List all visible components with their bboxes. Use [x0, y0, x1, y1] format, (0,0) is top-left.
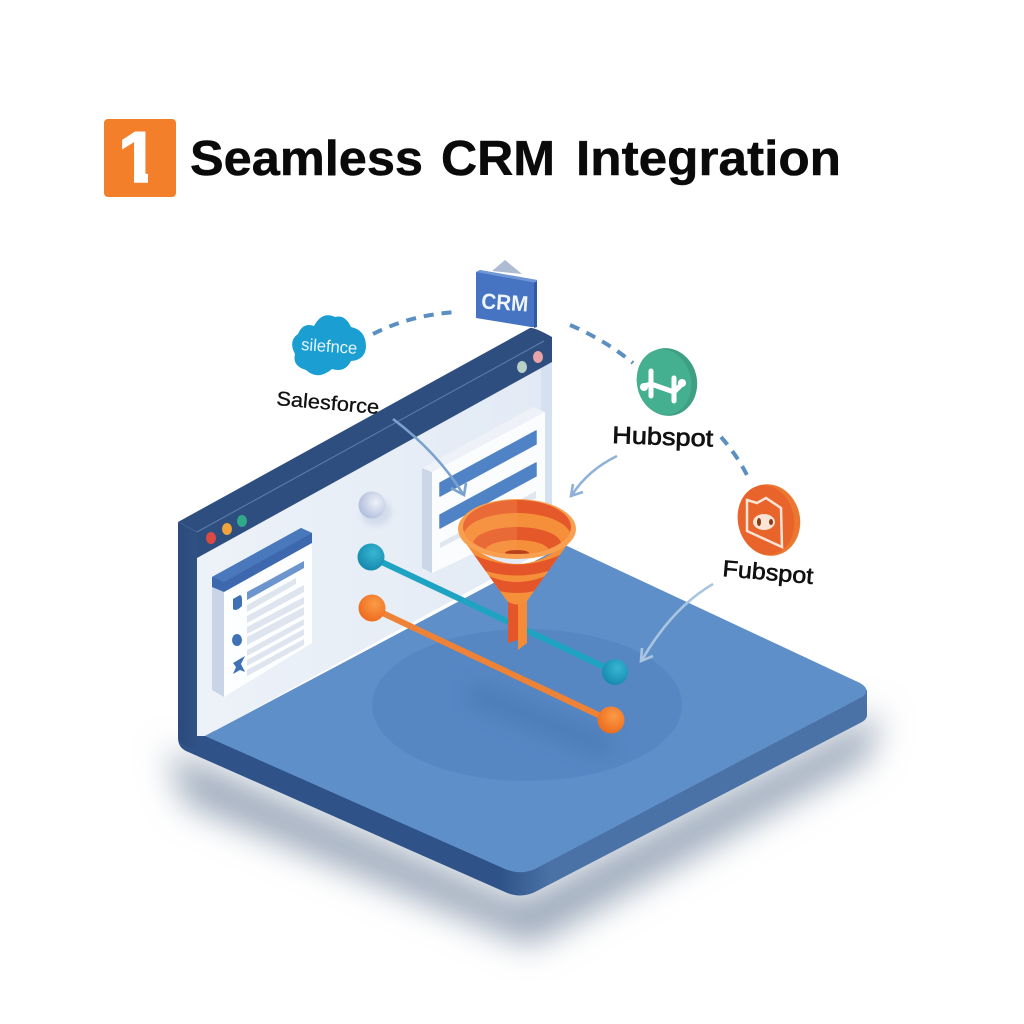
- cast shadow below connector lines: [470, 692, 610, 748]
- data spheres and connector lines: [358, 492, 628, 734]
- window header bar: [178, 328, 552, 558]
- arrow: Fubspot to platform: [641, 584, 713, 661]
- Hubspot label: Hubspot: [612, 422, 714, 453]
- Salesforce logo: [292, 315, 366, 375]
- icon: funnel: [458, 499, 576, 650]
- Fubspot logo: [731, 478, 807, 562]
- dashed connection arc: [373, 312, 748, 477]
- title: Integration: [576, 132, 841, 186]
- browser wall: [197, 362, 552, 736]
- teal connector: [371, 557, 615, 672]
- flow arrows: [393, 419, 713, 661]
- funnel cone: [462, 538, 572, 604]
- window control dots: [206, 351, 543, 544]
- Fubspot label: Fubspot: [722, 555, 815, 589]
- arrow: Hubspot to funnel: [571, 456, 617, 496]
- heading badge: number 1: 1: [118, 118, 158, 198]
- left form card: [212, 528, 312, 697]
- isometric platform and browser window: [168, 328, 880, 945]
- title: CRM: [441, 132, 555, 186]
- window left side: [178, 522, 205, 748]
- CRM badge: CRM: [481, 288, 529, 317]
- CRM badge: [476, 260, 537, 328]
- title: Seamless: [190, 132, 423, 186]
- heading badge: number 1: [104, 118, 176, 198]
- platform top surface: [205, 545, 867, 872]
- platform base: [178, 690, 867, 896]
- floor ellipse: [372, 629, 682, 781]
- right form card: [422, 407, 545, 573]
- orange connector: [372, 608, 609, 720]
- card icons: [232, 595, 245, 674]
- funnel rim: [458, 499, 576, 559]
- arrow: Salesforce to form: [393, 419, 466, 495]
- platform shadow: [168, 712, 880, 945]
- Salesforce label: Salesforce: [276, 388, 380, 419]
- funnel spout: [508, 600, 518, 643]
- Hubspot logo: [631, 343, 703, 421]
- Salesforce logo: silefnce: [301, 335, 358, 358]
